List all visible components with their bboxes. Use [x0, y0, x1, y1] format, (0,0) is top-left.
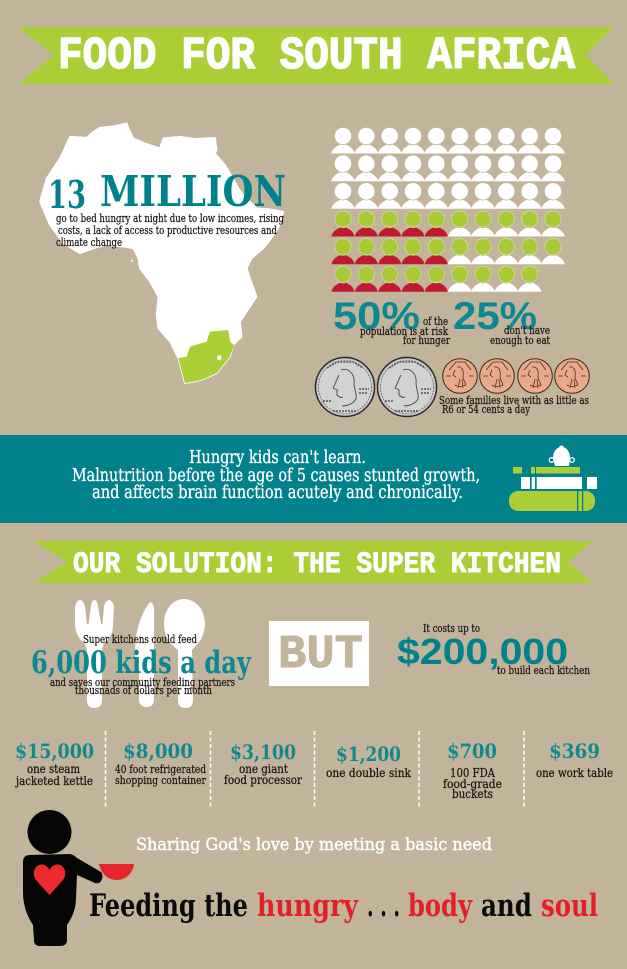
caption: enough to eat: [490, 334, 550, 347]
body: [23, 854, 102, 946]
cost item: table: [536, 739, 613, 780]
value: 25%: [453, 295, 537, 338]
message: and affects brain function acutely and chronically.: [92, 483, 463, 503]
closing headline: Feeding the: [89, 888, 248, 924]
closing headline: . . .: [367, 888, 400, 924]
penny 2: [480, 359, 514, 393]
fork: [75, 600, 114, 708]
cost item: sink: one double sink: [326, 766, 412, 780]
South Africa: [178, 330, 234, 383]
message: [72, 448, 480, 503]
cost item: table: one work table: [536, 766, 613, 780]
tagline: Sharing God's love by meeting a basic need: [136, 835, 492, 855]
caption: for hunger: [403, 334, 451, 347]
Lesotho: [217, 355, 222, 360]
coins caption: [439, 393, 589, 416]
13 million statistic: [48, 167, 286, 249]
BUT box: [269, 621, 369, 686]
cost item: table: $369: [549, 739, 600, 763]
cost item: container: $8,000: [123, 739, 193, 763]
coins caption: R6 or 54 cents a day: [442, 402, 530, 416]
icon: books and cooking pot: [509, 446, 597, 511]
number: 13: [48, 172, 86, 217]
ribbon: [33, 541, 593, 583]
lead-in: It costs up to: [423, 621, 480, 635]
caption: thousnads of dollars per month: [75, 683, 212, 697]
heading: OUR SOLUTION: THE SUPER KITCHEN: [73, 548, 561, 582]
panel: malnutrition band: [0, 435, 627, 523]
description: go to bed hungry at night due to low incomes, rising: [56, 211, 284, 225]
caption: and saves our community feeding partners: [50, 675, 235, 689]
band: [0, 435, 627, 523]
bowl: [99, 864, 134, 880]
map of Africa with South Africa highlighted: [40, 123, 283, 383]
cost item: container: 40 foot refrigerated: [115, 762, 206, 776]
Africa silhouette: [40, 123, 283, 383]
description: climate change: [56, 235, 122, 249]
value: 50%: [333, 295, 420, 338]
value: $200,000: [397, 631, 568, 672]
penny 4: [555, 359, 589, 393]
cost item: buckets: $700: [447, 739, 497, 763]
cost item: buckets: [443, 739, 502, 801]
title banner: [18, 27, 614, 84]
knife: [135, 602, 154, 707]
cost item: food processor: one giant: [239, 762, 288, 776]
description: costs, a lack of access to productive resources and: [58, 223, 277, 237]
closing headline: [89, 888, 598, 924]
cost item: container: shopping container: [115, 773, 206, 787]
ribbon: [18, 27, 614, 84]
super kitchen statistic: [31, 632, 252, 697]
penny 1: [443, 359, 477, 393]
cost item: kettle: one steam: [27, 762, 81, 776]
50 percent statistic: [333, 295, 451, 347]
spoon: [164, 599, 205, 708]
heart: [34, 864, 65, 895]
BUT box: BUT: [278, 629, 363, 682]
people pictogram grid: [331, 128, 565, 292]
cost item: sink: [326, 742, 412, 780]
cost item: food processor: [224, 740, 302, 787]
quarter 2: [378, 358, 436, 416]
caption: [360, 315, 451, 347]
description: [56, 211, 284, 249]
lead-in: Super kitchens could feed: [83, 632, 197, 646]
cost item: food processor: food processor: [224, 773, 302, 787]
million: MILLION: [100, 167, 286, 217]
kitchen cost: [397, 621, 590, 677]
message: Malnutrition before the age of 5 causes stunted growth,: [72, 466, 480, 486]
cost item: buckets: buckets: [452, 787, 493, 801]
caption: [490, 324, 550, 347]
solution banner: [33, 541, 593, 583]
closing headline: body: [408, 888, 473, 924]
value: 6,000 kids a day: [31, 645, 252, 681]
caption: to build each kitchen: [497, 663, 590, 677]
icon: person with heart offering bowl: [23, 810, 134, 946]
closing headline: and: [481, 888, 532, 924]
cost item: sink: $1,200: [336, 742, 401, 766]
caption: of the: [423, 315, 448, 328]
cost item: kettle: $15,000: [15, 739, 94, 763]
cost item: buckets: food-grade: [443, 777, 502, 791]
caption: don't have: [504, 324, 550, 337]
closing headline: soul: [541, 888, 598, 924]
cost item: kettle: [14, 739, 94, 788]
coins: [316, 358, 589, 416]
caption: population is at risk: [360, 325, 448, 338]
head: [28, 810, 72, 854]
penny 3: [518, 359, 552, 393]
25 percent statistic: [453, 295, 550, 347]
closing headline: hungry: [257, 888, 359, 924]
message: Hungry kids can't learn.: [189, 448, 366, 468]
icon: cutlery: [75, 599, 205, 708]
islands: [131, 249, 139, 262]
quarter 1: [316, 358, 374, 416]
caption: [50, 675, 235, 697]
cost item: food processor: $3,100: [230, 740, 296, 764]
cost item: container: [115, 739, 206, 787]
cost item: buckets: 100 FDA: [450, 766, 495, 780]
title: FOOD FOR SOUTH AFRICA: [58, 31, 575, 82]
cost item: kettle: jacketed kettle: [14, 774, 93, 788]
